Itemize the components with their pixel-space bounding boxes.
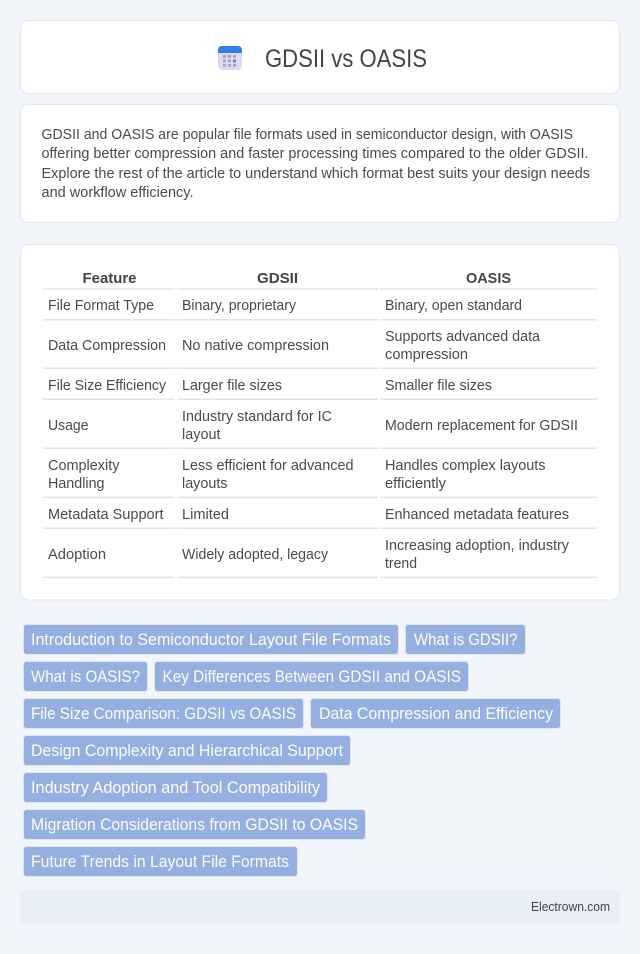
tag: file size comparison: File Size Comparison: GDSII vs OASIS [31, 704, 296, 723]
panel: header [20, 20, 620, 94]
row: complexity handling: efficiently [385, 476, 447, 492]
row: usage: Usage [48, 418, 88, 434]
row: adoption: trend [385, 556, 417, 572]
row: complexity handling: Handling [48, 476, 104, 492]
row: file size efficiency: File Size Efficiency [48, 378, 167, 394]
table header: GDSII [257, 270, 298, 287]
tag: data compression [310, 698, 560, 728]
row: file format type: File Format Type [48, 298, 154, 314]
tag: file size comparison [24, 698, 304, 728]
row: complexity handling: layouts [182, 476, 228, 492]
row: adoption [48, 538, 570, 572]
row: data compression: Supports advanced data [385, 329, 541, 345]
row: file format type [48, 298, 522, 314]
row: file format type: Binary, open standard [385, 298, 522, 314]
row: usage [48, 409, 578, 443]
row: usage: Modern replacement for GDSII [385, 418, 578, 434]
row: file size efficiency: Larger file sizes [182, 378, 282, 394]
row: complexity handling: Complexity [48, 458, 120, 474]
row: complexity handling: Handles complex layouts [385, 458, 546, 474]
row: file size efficiency [48, 378, 492, 394]
panel: intro text [20, 104, 620, 222]
topic tags [24, 624, 560, 876]
tag: future trends: Future Trends in Layout File Formats [31, 852, 289, 871]
row: data compression [48, 329, 541, 363]
row: data compression: No native compression [182, 338, 329, 354]
tag: introduction: Introduction to Semiconductor Layout File Formats [31, 630, 391, 649]
row: metadata support: Enhanced metadata features [385, 507, 569, 523]
row: complexity handling: Less efficient for advanced [182, 458, 354, 474]
tag: migration [24, 810, 366, 840]
tag: design complexity: Design Complexity and Hierarchical Support [31, 741, 343, 760]
tag: future trends [24, 846, 298, 876]
panel: intro text: Explore the rest of the article to understand which format best suits your design needs [42, 166, 590, 182]
row: usage: Industry standard for IC [182, 409, 332, 425]
tag: industry adoption: Industry Adoption and Tool Compatibility [31, 778, 320, 797]
tag: key differences: Key Differences Between GDSII and OASIS [162, 667, 461, 686]
tag: design complexity [24, 736, 350, 766]
tag: what is OASIS [24, 662, 148, 692]
footer: Electrown.com [531, 900, 610, 914]
row: adoption: Adoption [48, 547, 106, 563]
title: GDSII vs OASIS [265, 45, 427, 73]
row: complexity handling [48, 458, 546, 492]
panel: intro text: GDSII and OASIS are popular file formats used in semiconductor design, with OASIS [42, 127, 573, 143]
footer [20, 890, 620, 924]
table header: Feature [82, 270, 136, 287]
row: file size efficiency: Smaller file sizes [385, 378, 492, 394]
table header: OASIS [466, 270, 511, 287]
table header [82, 270, 511, 287]
row: data compression: Data Compression [48, 338, 166, 354]
row: metadata support: Metadata Support [48, 507, 164, 523]
row: metadata support: Limited [182, 507, 229, 523]
row: usage: layout [182, 427, 220, 443]
tag: key differences [154, 662, 468, 692]
icon: calendar [218, 46, 242, 70]
row: adoption: Widely adopted, legacy [182, 547, 329, 563]
tag: introduction [24, 624, 398, 654]
panel: comparison table [20, 244, 620, 600]
row: adoption: Increasing adoption, industry [385, 538, 570, 554]
panel: intro text: and workflow efficiency. [42, 185, 194, 201]
tag: data compression: Data Compression and Efficiency [319, 704, 553, 723]
tag: industry adoption [24, 772, 328, 802]
row: metadata support [48, 507, 569, 523]
tag: what is GDSII [406, 624, 526, 654]
tag: what is OASIS: What is OASIS? [31, 667, 140, 686]
row: file format type: Binary, proprietary [182, 298, 297, 314]
tag: migration: Migration Considerations from GDSII to OASIS [31, 815, 358, 834]
row: data compression: compression [385, 347, 468, 363]
tag: what is GDSII: What is GDSII? [414, 630, 518, 649]
panel: intro text: offering better compression and faster processing times compared to the older GDSII. [42, 146, 588, 162]
